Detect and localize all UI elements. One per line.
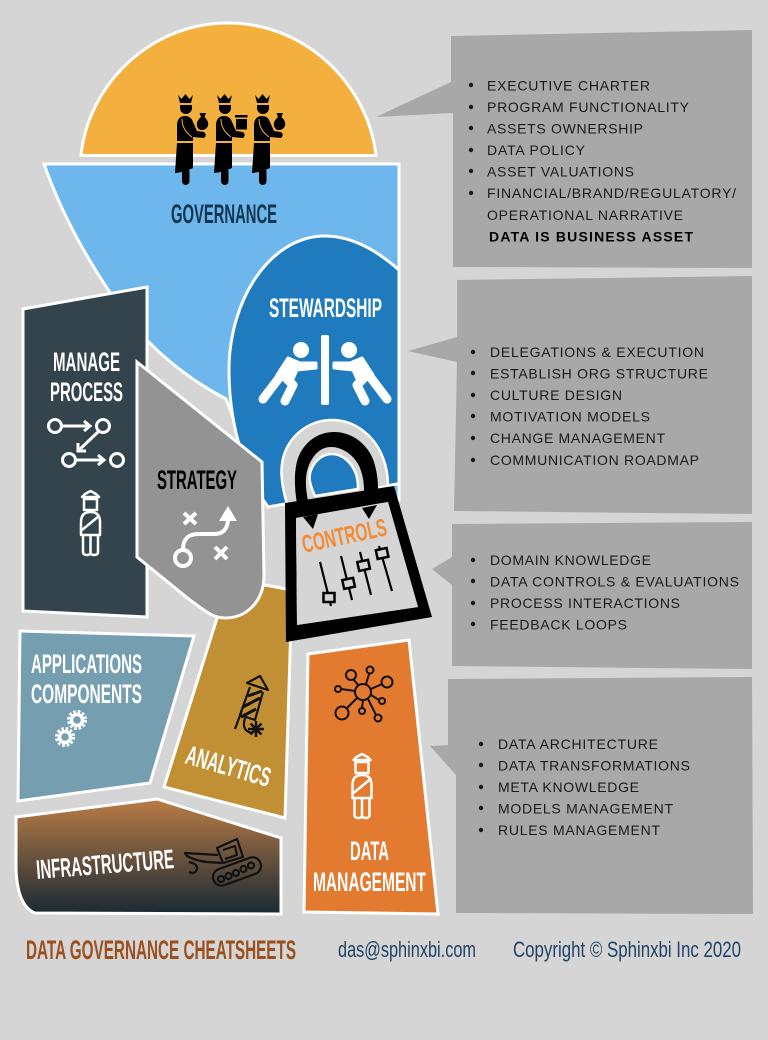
panel: strategy <box>137 362 264 618</box>
panel: governance bowl <box>44 164 399 500</box>
list: data management items <box>498 736 690 838</box>
list: data management items: DATA ARCHITECTURE <box>498 736 658 752</box>
list: data management items: META KNOWLEDGE <box>498 779 639 795</box>
list: stewardship items: CHANGE MANAGEMENT <box>490 430 665 446</box>
panel: stewardship <box>229 236 399 507</box>
list: governance items: FINANCIAL/BRAND/REGULATORY/ <box>487 185 736 201</box>
list: controls items <box>490 552 739 632</box>
heading: data management: MANAGEMENT <box>313 867 426 897</box>
callout: data management <box>430 677 753 914</box>
list: controls items: FEEDBACK LOOPS <box>490 616 627 632</box>
icon: king with box <box>214 94 248 185</box>
icon: excavator <box>185 839 263 888</box>
icon: right person <box>334 342 387 401</box>
icon: slider controls <box>320 546 392 606</box>
icon: guard figure <box>81 491 100 555</box>
icon: network hub <box>335 666 392 722</box>
list: governance items: DATA IS BUSINESS ASSET <box>489 228 693 244</box>
list: stewardship items: COMMUNICATION ROADMAP <box>490 452 699 468</box>
list: governance items <box>487 78 736 244</box>
icon: king with vase <box>175 94 208 185</box>
list: data management bullets <box>479 742 483 832</box>
list: stewardship items: MOTIVATION MODELS <box>490 408 650 424</box>
heading: analytics: ANALYTICS <box>182 740 274 793</box>
callout: governance <box>376 30 752 268</box>
list: data management items: RULES MANAGEMENT <box>498 822 660 838</box>
heading: applications components: COMPONENTS <box>31 679 142 709</box>
icon: padlock shackle <box>281 420 388 504</box>
list: governance bullets <box>469 83 473 195</box>
list: governance items: ASSETS OWNERSHIP <box>487 120 643 136</box>
list: stewardship items: CULTURE DESIGN <box>490 387 622 403</box>
icon: gears <box>56 712 86 746</box>
callout: stewardship <box>408 276 752 514</box>
list: governance items: ASSET VALUATIONS <box>487 164 634 180</box>
list: data management items: DATA TRANSFORMATIONS <box>498 758 690 774</box>
icon: two people pushing a wall <box>263 335 387 405</box>
list: data management items: MODELS MANAGEMENT <box>498 800 673 816</box>
list: controls items: DOMAIN KNOWLEDGE <box>490 552 651 568</box>
list: governance items: PROGRAM FUNCTIONALITY <box>487 99 690 115</box>
icon: left person <box>263 342 316 401</box>
heading: applications components: APPLICATIONS <box>31 649 142 679</box>
panel: controls padlock <box>281 420 432 642</box>
list: governance items: EXECUTIVE CHARTER <box>487 78 650 94</box>
heading: stewardship: STEWARDSHIP <box>269 293 382 323</box>
panel: governance semicircle <box>81 23 376 156</box>
list: controls items: DATA CONTROLS & EVALUATIONS <box>490 574 739 590</box>
heading: manage process: PROCESS <box>50 377 123 407</box>
panel: infrastructure <box>16 799 281 914</box>
heading: strategy: STRATEGY <box>157 465 237 495</box>
footer title: DATA GOVERNANCE CHEATSHEETS <box>26 935 296 965</box>
list: controls items: PROCESS INTERACTIONS <box>490 595 680 611</box>
footer email: das@sphinxbi.com <box>338 937 476 962</box>
list: stewardship items: ESTABLISH ORG STRUCTURE <box>490 366 708 382</box>
heading: controls: CONTROLS <box>299 514 389 559</box>
panel: applications components <box>18 631 194 801</box>
list: stewardship bullets <box>471 350 475 462</box>
heading: applications components <box>31 649 142 709</box>
icon: guard figure <box>352 754 372 818</box>
heading: manage process: MANAGE <box>53 347 120 377</box>
padlock body <box>285 486 432 642</box>
heading: data management: DATA <box>350 836 389 866</box>
callout: controls <box>432 522 752 669</box>
icon: king with jar <box>252 94 285 185</box>
icon: firework rocket <box>235 676 268 737</box>
icon: game plan <box>175 506 237 566</box>
icon: three kings <box>175 94 285 185</box>
panel: analytics <box>164 585 292 818</box>
list: stewardship items <box>490 344 708 468</box>
panel: manage process <box>23 287 147 617</box>
list: stewardship items: DELEGATIONS & EXECUTION <box>490 344 704 360</box>
icon: process flow <box>48 420 124 466</box>
heading: infrastructure: INFRASTRUCTURE <box>35 844 175 885</box>
heading: manage process <box>50 347 123 407</box>
panel: data management <box>304 640 438 914</box>
list: controls bullets <box>471 558 475 626</box>
list: governance items: OPERATIONAL NARRATIVE <box>487 207 683 223</box>
heading: data management <box>313 836 426 897</box>
heading: governance: GOVERNANCE <box>171 199 277 229</box>
list: governance items: DATA POLICY <box>487 142 586 158</box>
